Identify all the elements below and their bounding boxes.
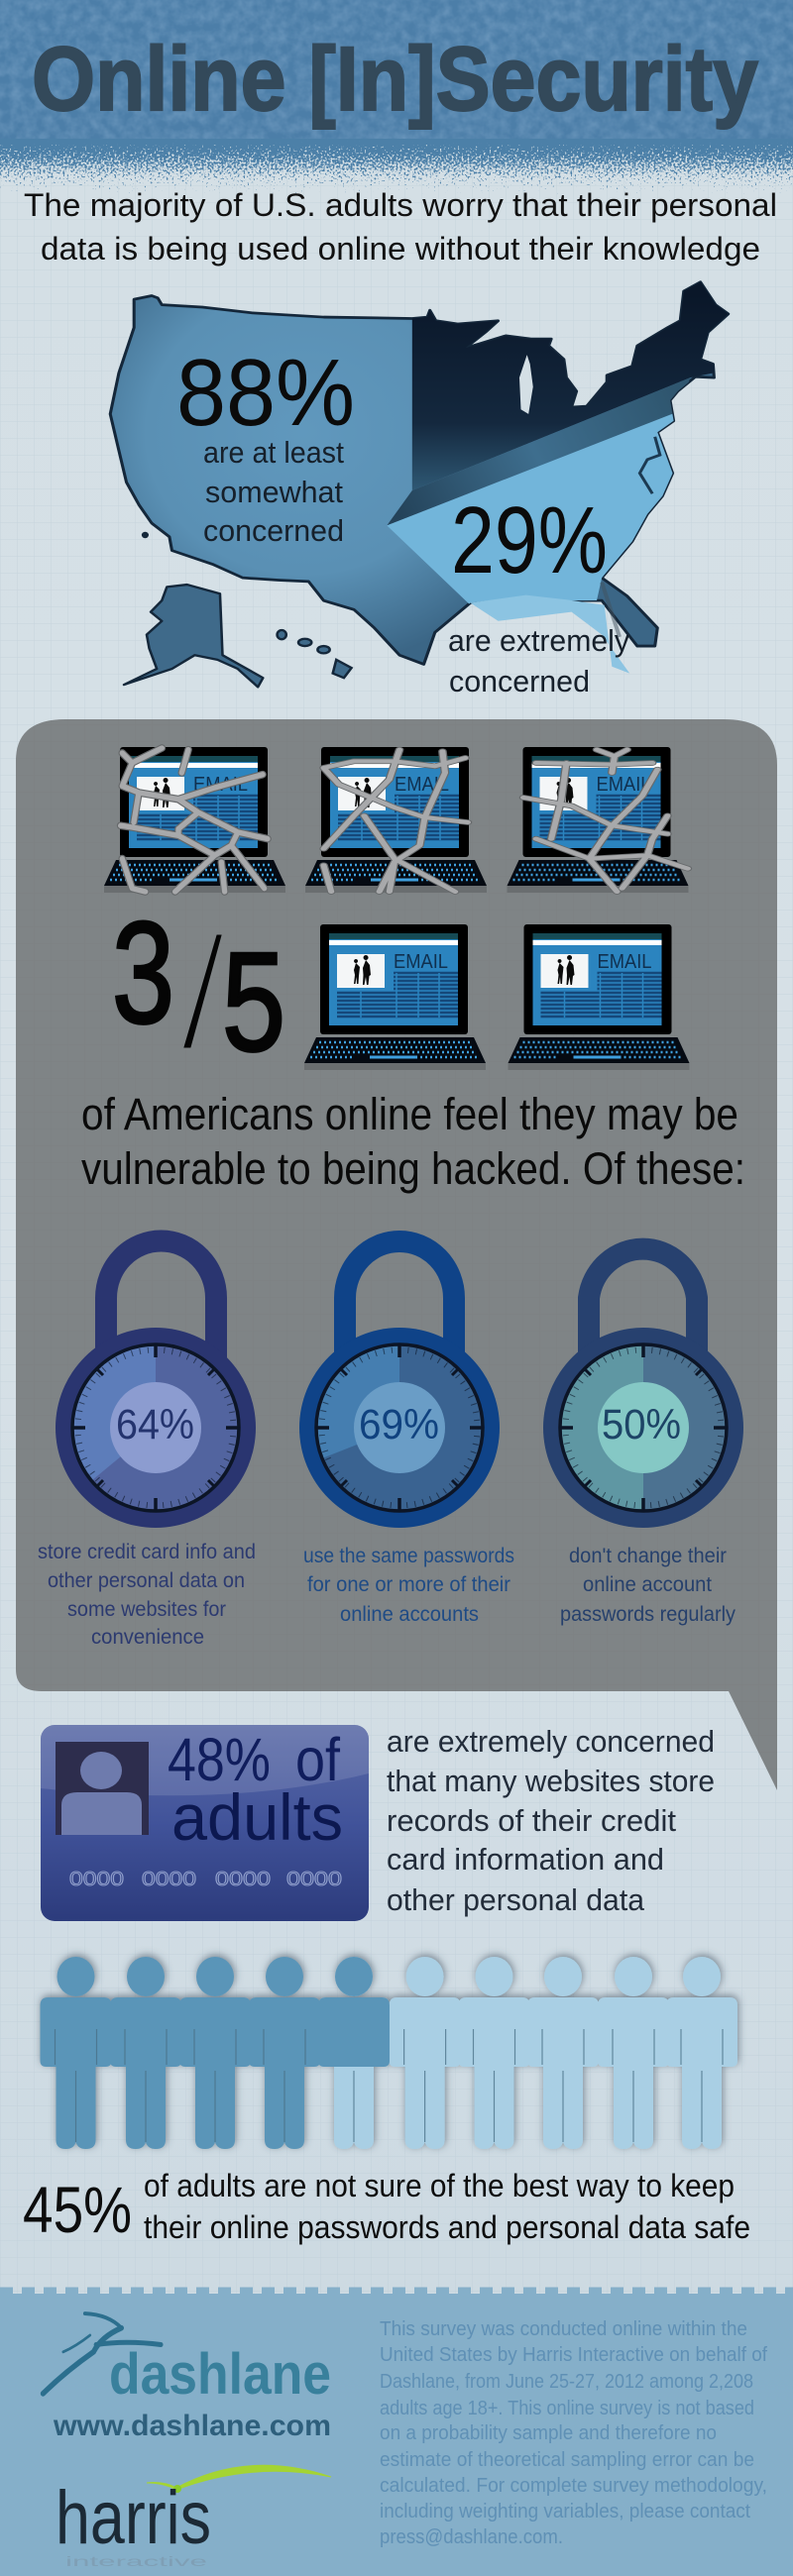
survey methodology text: Dashlane, from June 25-27, 2012 among 2,208 <box>380 2371 753 2393</box>
caption: 64 percent: store credit card info and <box>38 1541 256 1563</box>
logo: harris: harris <box>56 2476 211 2560</box>
caption: 64 percent: other personal data on <box>48 1569 245 1592</box>
logo: dashlane <box>43 2313 331 2442</box>
88 percent label: somewhat <box>205 475 343 509</box>
survey methodology text: press@dashlane.com. <box>380 2526 563 2548</box>
88 percent label <box>176 340 355 548</box>
map shapes <box>110 273 758 687</box>
intact laptop 5 <box>508 924 690 1070</box>
subtitle: data is being used online without their knowledge <box>41 231 760 267</box>
caption: 50 percent <box>560 1545 736 1626</box>
card number: 0000 <box>286 1869 342 1890</box>
survey methodology text: on a probability sample and therefore no <box>380 2422 717 2444</box>
29 percent label: 29% <box>451 487 608 593</box>
card number: 0000 <box>142 1869 196 1890</box>
card statistic text: records of their credit <box>387 1803 676 1838</box>
survey methodology text <box>380 2318 767 2548</box>
caption: 69 percent <box>303 1545 514 1626</box>
lock: 50 percent <box>543 1249 743 1528</box>
caption: 64 percent <box>38 1541 256 1649</box>
subtitle <box>24 187 777 267</box>
card statistic text: other personal data <box>387 1882 645 1917</box>
card statistic text: that many websites store <box>387 1764 715 1798</box>
hacked laptop 2: EMAIL <box>395 774 449 796</box>
hacked laptop 3: EMAIL <box>597 774 650 796</box>
survey methodology text: estimate of theoretical sampling error can be <box>380 2449 754 2471</box>
intact laptop 5: EMAIL <box>597 951 652 973</box>
caption: 69 percent: use the same passwords <box>303 1545 514 1567</box>
29 percent label: are extremely <box>448 623 629 658</box>
caption: 64 percent: some websites for <box>67 1598 226 1621</box>
hacked laptop 3 <box>508 747 688 893</box>
intact laptop 4: EMAIL <box>394 951 448 973</box>
credit card: adults <box>171 1780 343 1854</box>
88 percent label: are at least <box>203 435 344 470</box>
card statistic text: are extremely concerned <box>387 1724 715 1759</box>
three fifths figure <box>112 892 285 1081</box>
45 percent statistic: 45% <box>23 2173 132 2246</box>
survey methodology text: United States by Harris Interactive on behalf of <box>380 2344 767 2366</box>
header band <box>0 0 793 194</box>
card statistic text: card information and <box>387 1842 664 1877</box>
lock: 69 percent: 69% <box>359 1401 439 1449</box>
card number: 0000 <box>69 1869 124 1890</box>
hacked laptop 1: EMAIL <box>193 774 248 796</box>
88 percent label: 88% <box>176 340 355 446</box>
45 percent statistic: their online passwords and personal data safe <box>144 2209 750 2245</box>
lock: 69 percent <box>299 1241 500 1528</box>
lock: 50 percent: 50% <box>602 1401 681 1449</box>
intact laptop 4 <box>304 924 486 1070</box>
lock: 64 percent <box>56 1240 256 1528</box>
vulnerable text <box>81 1089 745 1194</box>
logo: dashlane: www.dashlane.com <box>53 2410 331 2442</box>
three fifths figure: 5 <box>222 923 285 1081</box>
hacked laptop 2 <box>305 747 487 893</box>
survey methodology text: This survey was conducted online within the <box>380 2318 747 2340</box>
caption: 50 percent: passwords regularly <box>560 1603 736 1626</box>
29 percent label: concerned <box>449 664 590 698</box>
logo: harris: interactive <box>65 2553 207 2569</box>
card statistic text <box>387 1724 715 1917</box>
US map with concern shares <box>110 273 758 698</box>
caption: 50 percent: online account <box>583 1573 712 1596</box>
card number: 0000 <box>215 1869 271 1890</box>
45 percent statistic <box>23 2168 750 2246</box>
caption: 69 percent: for one or more of their <box>307 1573 510 1596</box>
panel: vulnerable speech bubble <box>16 719 777 1790</box>
caption: 69 percent: online accounts <box>340 1603 479 1626</box>
logo: dashlane: dashlane <box>109 2342 331 2407</box>
logo: harris <box>56 2465 331 2569</box>
survey methodology text: adults age 18+. This online survey is not based <box>380 2398 754 2419</box>
subtitle: The majority of U.S. adults worry that their personal <box>24 187 777 223</box>
card photo <box>56 1742 149 1835</box>
45 percent statistic: of adults are not sure of the best way to keep <box>144 2168 735 2203</box>
footer band <box>0 2291 793 2576</box>
credit card: 48% <box>168 1726 271 1793</box>
caption: 64 percent: convenience <box>91 1626 204 1649</box>
credit card: of <box>295 1726 341 1793</box>
people pictogram <box>40 1957 737 2149</box>
29 percent label <box>448 487 629 698</box>
caption: 50 percent: don't change their <box>569 1545 727 1567</box>
credit card <box>41 1725 369 1921</box>
icon: gazelle <box>43 2313 161 2394</box>
hacked laptop 1 <box>104 747 285 893</box>
lock: 64 percent: 64% <box>116 1401 194 1449</box>
card number <box>69 1869 342 1890</box>
three fifths figure: 3 <box>112 892 174 1053</box>
88 percent label: concerned <box>203 513 344 548</box>
survey methodology text: including weighting variables, please contact <box>380 2501 750 2522</box>
survey methodology text: calculated. For complete survey methodology, <box>380 2475 767 2497</box>
vulnerable text: of Americans online feel they may be <box>81 1089 738 1139</box>
